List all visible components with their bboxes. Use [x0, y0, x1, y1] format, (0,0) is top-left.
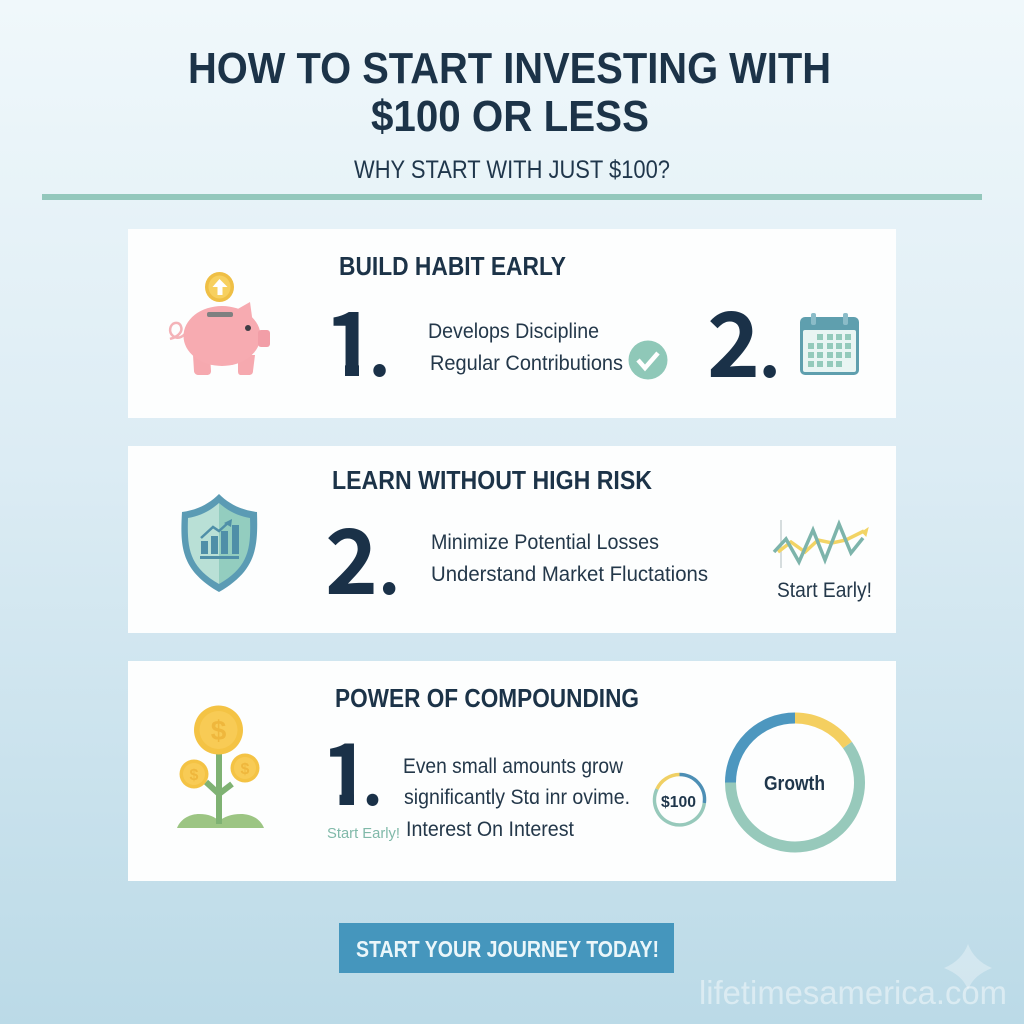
panel: power of compounding — [128, 661, 896, 881]
title: HOW TO START INVESTING WITH — [188, 44, 831, 93]
panel: learn without high risk — [128, 446, 896, 633]
icon: shield with chart — [181, 494, 257, 592]
icon: sparkle — [944, 944, 992, 990]
heading: learn without high risk: LEARN WITHOUT HIGH RISK — [332, 465, 652, 495]
chart: growth ring: Growth — [764, 773, 825, 795]
chart: small ring $100 — [654, 774, 705, 825]
watermark: lifetimesamerica.com — [699, 974, 1007, 1011]
icon: coin plant — [177, 706, 264, 828]
panel: build habit early — [128, 229, 896, 418]
number 1: 1. — [321, 707, 383, 830]
text: even small amounts grow: Even small amounts grow — [403, 755, 624, 778]
subtitle: WHY START WITH JUST $100? — [354, 156, 670, 184]
chart: growth ring — [730, 718, 859, 847]
text: minimize potential losses: Minimize Potential Losses — [431, 531, 659, 554]
chart: market line — [774, 520, 868, 568]
text: regular contributions: Regular Contributions — [430, 352, 623, 375]
icon: piggy bank with coin — [170, 272, 270, 375]
icon: coin plant: $ — [190, 767, 199, 784]
icon: coin plant: $ — [211, 715, 227, 746]
number 2: 2. — [707, 273, 781, 403]
chart: small ring $100: $100 — [661, 794, 696, 811]
text: interest on interest: Interest On Interest — [406, 818, 574, 841]
icon: coin plant: $ — [241, 761, 250, 778]
text: start early: Start Early! — [327, 825, 400, 842]
number 1: 1. — [324, 273, 391, 402]
text: start early: Start Early! — [777, 579, 872, 602]
title — [188, 44, 831, 141]
number 2: 2. — [325, 490, 400, 620]
text: develops discipline: Develops Discipline — [428, 320, 599, 343]
title: $100 OR LESS — [371, 92, 649, 141]
text: significantly: significantly Stɑ inr ovime. — [404, 786, 630, 809]
icon: calendar — [800, 313, 859, 375]
button: start your journey today — [339, 923, 674, 973]
button: start your journey today: START YOUR JOURNEY TODAY! — [356, 936, 659, 962]
text: understand market fluctations: Understand Market Fluctations — [431, 563, 708, 586]
heading: build habit early: BUILD HABIT EARLY — [339, 251, 566, 281]
icon: check — [628, 340, 668, 380]
heading: power of compounding: POWER OF COMPOUNDING — [335, 683, 639, 713]
